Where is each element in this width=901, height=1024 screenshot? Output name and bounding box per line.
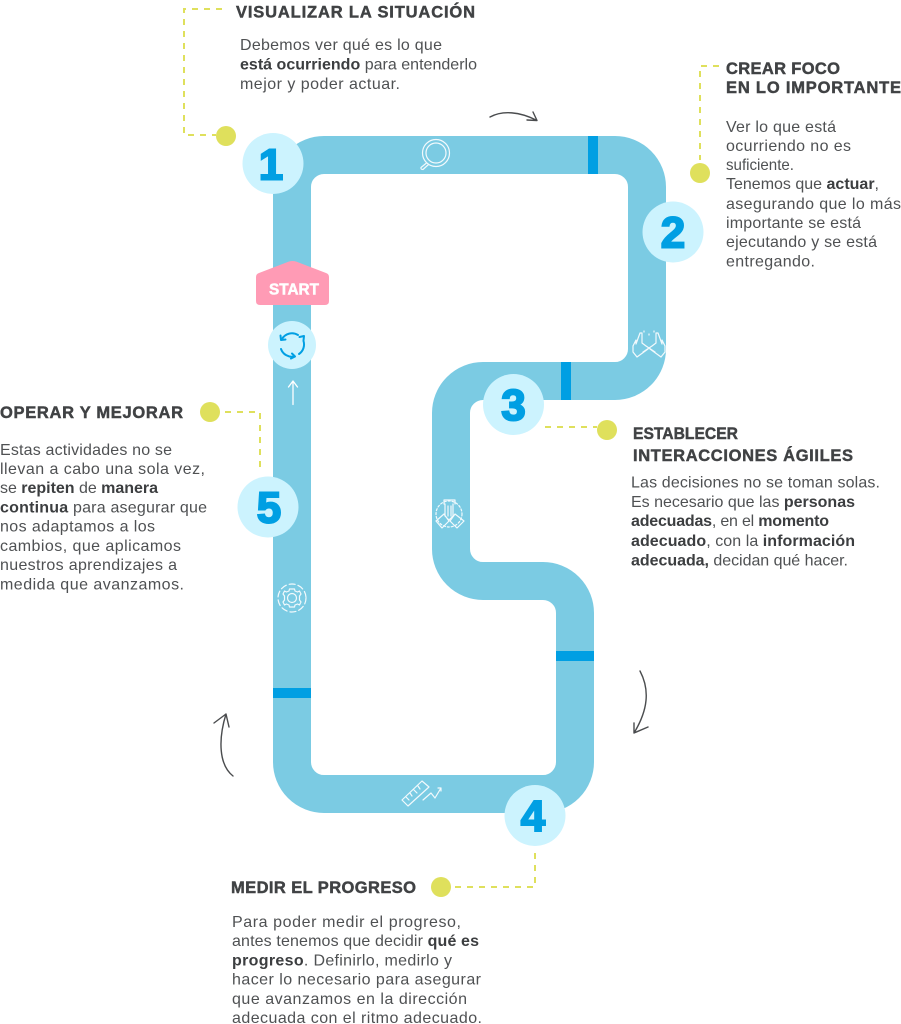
icon: joined hands — [436, 500, 464, 528]
heading: EN LO IMPORTANTE — [726, 79, 901, 97]
connector: step 4 — [452, 853, 535, 887]
connector: step 2 — [700, 66, 719, 160]
panel: medir el progreso — [231, 879, 482, 1024]
heading — [726, 60, 901, 97]
text block: Ver lo que está — [726, 119, 836, 136]
text block: suficiente. — [726, 157, 794, 174]
text block: Las decisiones no se toman solas. — [631, 474, 880, 492]
text block: adecuada, decidan qué hacer. — [631, 552, 848, 570]
text block: antes tenemos que decidir qué es — [232, 933, 479, 950]
text block: entregando. — [726, 254, 815, 270]
panel: crear foco — [726, 60, 901, 270]
text block: importante se está — [726, 215, 861, 232]
icon: cycle badge — [268, 321, 316, 369]
text block: está ocurriendo para entenderlo — [240, 56, 477, 74]
connector: step 5 — [225, 412, 260, 473]
text block: Estas actividades no se — [0, 442, 172, 459]
step badge 3: 3 — [501, 381, 526, 430]
track: winding light-blue path — [292, 155, 647, 794]
yellow-green marker dots — [200, 126, 710, 897]
step badge 5 — [238, 476, 298, 538]
icon: hands framing — [633, 331, 665, 357]
heading: ESTABLECER — [633, 425, 738, 443]
arrow: right — [634, 671, 648, 733]
heading — [633, 425, 853, 465]
heading: CREAR FOCO — [726, 60, 840, 78]
text block: nos adaptamos a los — [0, 518, 155, 536]
text block: progreso. Definirlo, medirlo y — [232, 952, 452, 970]
step badge 1: 1 — [259, 140, 283, 190]
step badge 1 — [242, 133, 304, 194]
step badge 5: 5 — [257, 484, 281, 532]
step badge 2: 2 — [661, 208, 685, 258]
text block: continua para asegurar que — [0, 500, 207, 516]
step badge 2 — [642, 202, 704, 262]
panel: operar y mejorar — [0, 404, 207, 594]
step badge 3 — [483, 374, 544, 435]
text block: mejor y poder actuar. — [240, 76, 400, 93]
start sign: START — [269, 282, 319, 298]
text block: ocurriendo no es — [726, 138, 851, 155]
text block: nuestros aprendizajes a — [0, 557, 177, 574]
start sign — [256, 261, 329, 305]
text block: adecuado, con la información — [631, 533, 855, 550]
text block — [726, 119, 901, 270]
arrow: top — [490, 112, 537, 120]
text block: Debemos ver qué es lo que — [240, 37, 442, 54]
arrow: left — [214, 714, 233, 776]
step badge 4 — [504, 785, 566, 846]
connector: step 3 — [545, 426, 597, 428]
icon: white up arrow — [288, 381, 298, 404]
text block: medida que avanzamos. — [0, 576, 184, 594]
text block: asegurando que lo más — [726, 196, 901, 213]
text block: Tenemos que actuar, — [726, 176, 879, 193]
icon: magnifying glass — [421, 140, 450, 170]
text block: adecuadas, en el momento — [631, 513, 829, 530]
text block — [240, 37, 477, 93]
text block: que avanzamos en la dirección — [232, 991, 467, 1008]
track dividers: darker blue bars — [273, 136, 598, 698]
text block: ejecutando y se está — [726, 234, 877, 251]
heading: OPERAR Y MEJORAR — [0, 404, 183, 422]
text block: llevan a cabo una sola vez, — [0, 461, 205, 478]
icon: gear with orbit — [278, 584, 306, 612]
text block — [0, 442, 207, 594]
connector: step 1 — [184, 9, 222, 135]
panel: establecer interacciones — [631, 425, 880, 570]
text block: hacer lo necesario para asegurar — [232, 972, 482, 988]
step badge 4: 4 — [521, 792, 546, 841]
text block: se repiten de manera — [0, 480, 158, 497]
text block: Es necesario que las personas — [631, 494, 855, 511]
icon: ruler and trend — [402, 781, 441, 806]
heading: MEDIR EL PROGRESO — [231, 879, 416, 897]
text block — [232, 914, 482, 1024]
text block — [631, 474, 880, 570]
heading: VISUALIZAR LA SITUACIÓN — [236, 2, 475, 22]
text block: Para poder medir el progreso, — [232, 914, 461, 931]
heading: INTERACCIONES ÁGIILES — [633, 446, 853, 465]
panel: visualizar la situación — [236, 2, 477, 93]
text block: cambios, que aplicamos — [0, 538, 181, 555]
